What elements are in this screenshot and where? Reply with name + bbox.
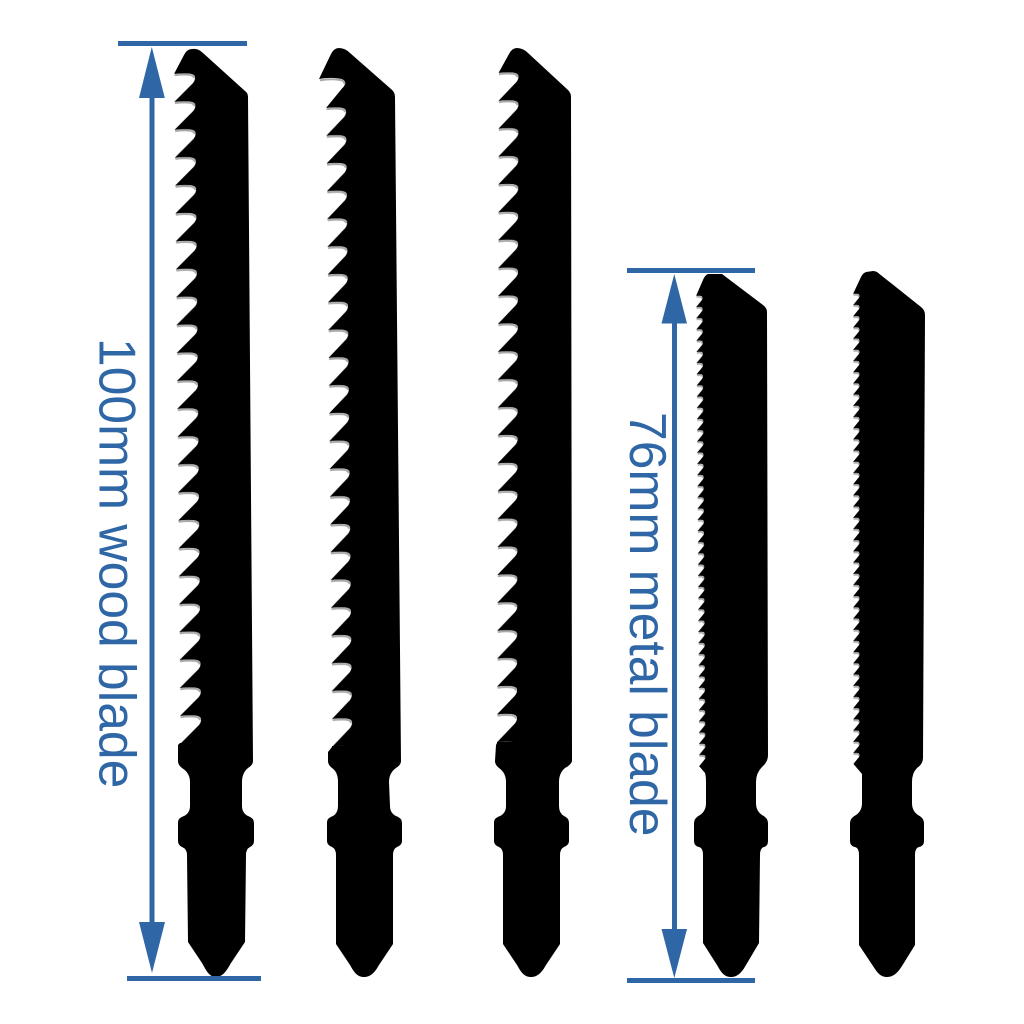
blade 3: wood blade <box>492 48 572 977</box>
label: 76mm metal blade: 76mm metal blade <box>619 412 677 836</box>
label: 100mm wood blade: 100mm wood blade <box>88 338 146 788</box>
dimension arrow: 76mm <box>627 268 755 983</box>
blade 1: 100mm wood blade <box>170 49 254 977</box>
blade 4: 76mm metal blade <box>692 274 768 977</box>
dimension arrow: 100mm <box>118 41 261 981</box>
blade 2: wood blade <box>319 48 402 977</box>
blade 5: metal blade <box>849 271 925 977</box>
